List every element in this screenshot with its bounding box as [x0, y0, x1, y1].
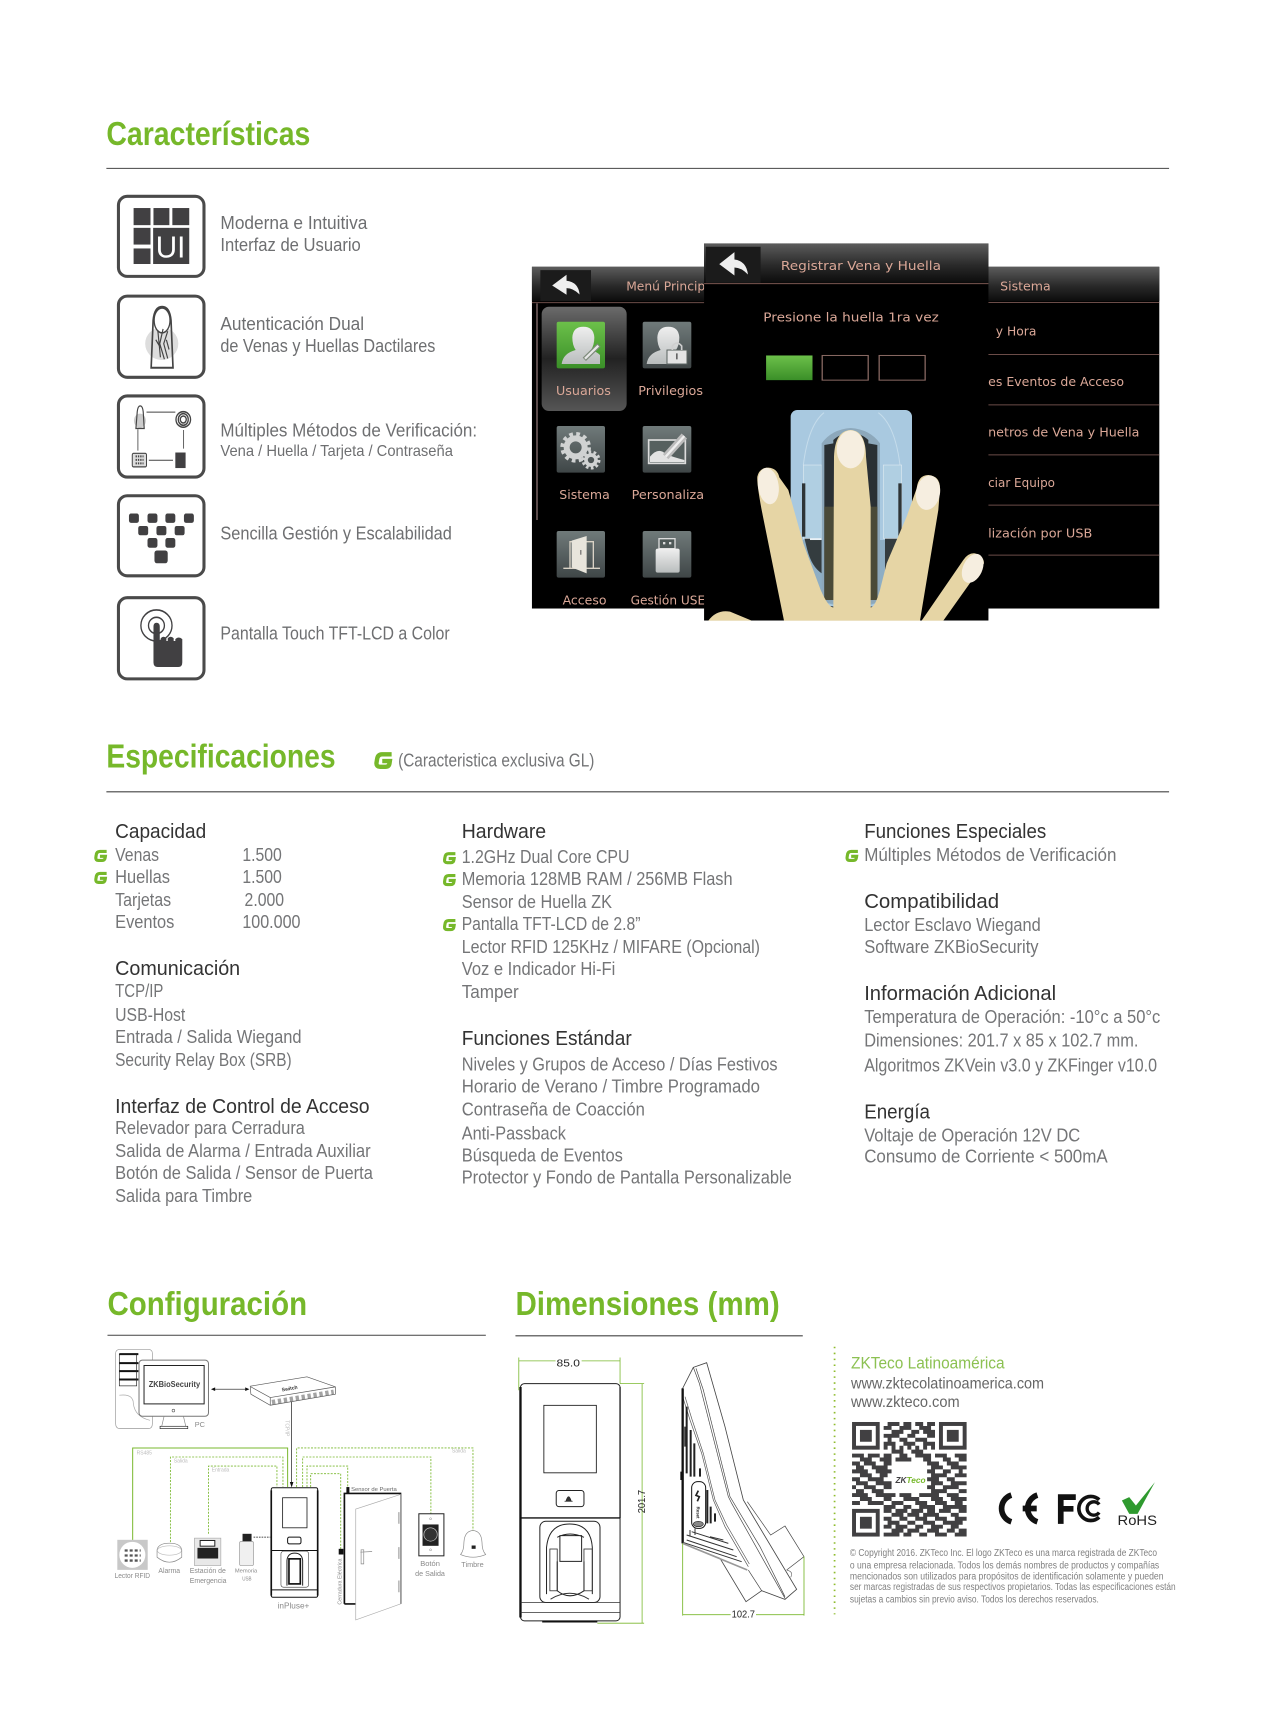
icon: FCC mark [1061, 1496, 1099, 1524]
text block: Capacidad: Eventos [115, 912, 174, 932]
text block: Hardware: Hardware [462, 821, 546, 843]
text block: Hardware: Sensor de Huella ZK [462, 892, 612, 912]
icon: PC with ZKBioSecurity: PC [195, 1420, 206, 1429]
text block: Funciones Estándar: Niveles y Grupos de Acceso / Días Festivos [462, 1054, 778, 1074]
text block: Hardware: 1.2GHz Dual Core CPU [462, 847, 630, 867]
diagram: configuration wiring [115, 1349, 486, 1620]
text block: Comunicación [115, 958, 302, 1070]
text block: Hardware: Pantalla TFT-LCD de 2.8” [462, 914, 640, 934]
drawing: side view [681, 1363, 804, 1602]
screen: main menu: Gestión USE [631, 592, 705, 607]
text block: Interfaz de Control de Acceso [115, 1096, 374, 1206]
screen: system menu: ciar Equipo [988, 475, 1055, 490]
text block: Comunicación: USB-Host [115, 1005, 185, 1025]
heading: Configuración: Configuración [107, 1285, 307, 1322]
text block: Información Adicional [864, 983, 1160, 1075]
text: dual authentication: Autenticación Dual [220, 314, 364, 334]
text block: Energía: Consumo de Corriente < 500mA [864, 1147, 1109, 1167]
icon: alarm: Alarma [158, 1566, 181, 1575]
text block: Comunicación: Comunicación [115, 958, 240, 980]
text block: Hardware: Tamper [462, 982, 519, 1002]
icon: privileges [647, 327, 687, 364]
screen: register vein and fingerprint: Presione la huella 1ra vez [763, 309, 939, 324]
text block: Interfaz de Control de Acceso: Botón de Salida / Sensor de Puerta [115, 1163, 374, 1183]
icon: exit button: Botón [420, 1559, 440, 1568]
text block: Funciones Estándar: Anti-Passback [462, 1123, 567, 1143]
icon: bell: Timbre [461, 1560, 484, 1569]
text: interface: Moderna e Intuitiva [220, 213, 368, 233]
screen: system menu: netros de Vena y Huella [988, 425, 1139, 440]
icon: G mark special functions [847, 851, 858, 860]
text block: Hardware [462, 821, 760, 1002]
icon: inPluse+ device: inPluse+ [278, 1600, 309, 1610]
screen: main menu: Sistema [559, 487, 610, 502]
panel: device screens [532, 243, 1159, 621]
icon: USB memory [235, 1534, 270, 1583]
panel: feature list [118, 196, 477, 679]
icon: RFID reader: Lector RFID [115, 1571, 150, 1580]
text block: Hardware: Voz e Indicador Hi-Fi [462, 959, 615, 979]
panel: specifications column 2 [445, 821, 792, 1187]
icon: RoHS: RoHS [1118, 1512, 1157, 1528]
icon: emergency station: Emergencia [190, 1576, 227, 1585]
icon: door with sensor and lock [338, 1487, 400, 1620]
text: verification methods [220, 421, 477, 460]
icon: alarm [157, 1543, 182, 1575]
icon: hand [708, 430, 988, 621]
icon: switch: Switch [281, 1385, 298, 1394]
icon: door with sensor and lock: Sensor de Puerta [351, 1487, 398, 1493]
heading: Especificaciones: Especificaciones [106, 738, 336, 775]
icon: fingerprint scanner [791, 410, 912, 607]
text block: Hardware: Lector RFID 125KHz / MIFARE (Opcional) [462, 937, 760, 957]
text block: Funciones Especiales [864, 821, 1116, 865]
icon: scalable management [118, 496, 204, 576]
label: width [556, 1356, 582, 1370]
text block: copyright: sujetas a cambios sin previo aviso. Todos los derechos reservados. [850, 1594, 1099, 1605]
text block: copyright [850, 1548, 1176, 1605]
icon: QR code [852, 1424, 967, 1535]
label: depth: 102.7 [732, 1609, 755, 1620]
screen: main menu [532, 267, 705, 609]
text block: contact: ZKTeco Latinoamérica [851, 1354, 1005, 1373]
text block: Energía [864, 1102, 1109, 1167]
text block: Capacidad [115, 821, 300, 932]
text block: Interfaz de Control de Acceso: Interfaz de Control de Acceso [115, 1096, 370, 1118]
text: verification methods: Vena / Huella / Tarjeta / Contraseña [220, 443, 453, 460]
text block: Capacidad: 1.500 [242, 867, 282, 887]
labels: wire names: Salida [174, 1459, 188, 1465]
icon: G marks capacity [96, 851, 107, 882]
icon: door with sensor and lock: Cerradura Eléctrica [338, 1558, 344, 1605]
text: management: Sencilla Gestión y Escalabilidad [220, 524, 452, 544]
icon: inPluse+ device [271, 1488, 318, 1610]
text block: Comunicación: Security Relay Box (SRB) [115, 1050, 292, 1070]
labels: wire names: RS485 [137, 1451, 152, 1457]
text block: Energía: Energía [864, 1102, 931, 1124]
icon: USB drive [656, 539, 680, 573]
wiring: green connections [133, 1448, 473, 1549]
icon: PC with ZKBioSecurity [116, 1349, 208, 1429]
arrow: switch to device [290, 1402, 293, 1486]
dimension lines [519, 1358, 644, 1623]
text block: copyright: o una empresa relacionada. Todos los demás nombres de productos y compañías [850, 1560, 1159, 1571]
icon: personalize [649, 436, 685, 463]
icon: user interface [118, 196, 204, 276]
icon: PC with ZKBioSecurity: ZKBioSecurity [149, 1379, 200, 1389]
text block: Funciones Estándar: Contraseña de Coacción [462, 1099, 645, 1119]
screen: system menu: Sistema [1000, 279, 1051, 294]
text block: Interfaz de Control de Acceso: Salida para Timbre [115, 1186, 252, 1206]
text block: Capacidad: 2.000 [245, 890, 284, 910]
label: width: 85.0 [557, 1359, 580, 1370]
screen: main menu: Personaliza [632, 487, 704, 502]
diagram: dimensions front [519, 1356, 648, 1623]
text block: copyright: © Copyright 2016. ZKTeco Inc. El logo ZKTeco es una marca registrada de ZKTeco [850, 1548, 1157, 1559]
icon: gears [562, 434, 599, 468]
icon: finger veins [118, 296, 204, 377]
labels: wire names [137, 1449, 466, 1474]
text block: Interfaz de Control de Acceso: Relevador para Cerradura [115, 1118, 306, 1138]
icon: USB memory: Memoria [235, 1569, 257, 1575]
icon: verification methods [118, 396, 204, 477]
text block: Funciones Especiales: Múltiples Métodos de Verificación [864, 845, 1116, 865]
text block: Interfaz de Control de Acceso: Salida de Alarma / Entrada Auxiliar [115, 1141, 371, 1161]
text: interface: Interfaz de Usuario [220, 235, 361, 255]
icon: switch [250, 1377, 335, 1405]
text block: Funciones Estándar: Búsqueda de Eventos [462, 1145, 623, 1165]
icon: QR code: ZKTeco [895, 1475, 926, 1485]
text block: Capacidad: 100.000 [242, 912, 300, 932]
text block: Capacidad: Capacidad [115, 821, 206, 843]
icon: G marks hardware [445, 854, 455, 930]
text block: Capacidad: Venas [115, 845, 159, 865]
icon: bell [461, 1530, 486, 1569]
icon: exit button [415, 1514, 446, 1578]
text block: Funciones Estándar: Protector y Fondo de Pantalla Personalizable [462, 1167, 792, 1187]
screen: system menu [988, 267, 1159, 609]
screen: register vein and fingerprint: Registrar Vena y Huella [781, 258, 941, 273]
panel: specifications column 3 [847, 821, 1160, 1167]
drawing: front view [520, 1384, 620, 1622]
icon: user [562, 327, 600, 364]
icon: door [563, 536, 600, 573]
text block: Compatibilidad [864, 891, 1041, 957]
text block: Comunicación: TCP/IP [115, 981, 163, 1001]
icon: emergency station: Estación de [190, 1566, 226, 1575]
label: height: 201.7 [637, 1489, 648, 1513]
text block: Información Adicional: Algoritmos ZKVein v3.0 y ZKFinger v10.0 [864, 1055, 1157, 1075]
text block: Compatibilidad: Lector Esclavo Wiegand [864, 915, 1041, 935]
labels: wire names: Salida [452, 1449, 466, 1455]
drawing: side view: Reset [696, 1507, 701, 1519]
icon: user interface: UI [156, 230, 185, 265]
text: dual authentication [220, 314, 435, 356]
screen: system menu: lización por USB [988, 525, 1092, 540]
icon: touch screen [118, 598, 204, 679]
icon: exit button: de Salida [415, 1569, 446, 1578]
screen: main menu: Privilegios [638, 383, 703, 398]
screen: main menu: Menú Princip [626, 279, 705, 294]
text block: Compatibilidad: Compatibilidad [864, 891, 999, 913]
text block: Capacidad: Tarjetas [115, 890, 171, 910]
text block: Información Adicional: Temperatura de Operación: -10°c a 50°c [864, 1007, 1160, 1027]
text block: Capacidad: 1.500 [242, 845, 282, 865]
text block: Energía: Voltaje de Operación 12V DC [864, 1126, 1080, 1146]
label: TCP/IP: TCP/IP [284, 1420, 290, 1437]
panel: contact and certifications [850, 1354, 1176, 1605]
text: interface [220, 213, 368, 255]
diagram: dimensions side [681, 1363, 804, 1620]
icon: USB memory: USB [242, 1577, 252, 1583]
heading: Dimensiones: Dimensiones (mm) [515, 1285, 780, 1322]
text block: Funciones Estándar: Horario de Verano / Timbre Programado [462, 1076, 760, 1096]
text block: Compatibilidad: Software ZKBioSecurity [864, 937, 1039, 957]
labels: wire names: Entrada [212, 1468, 230, 1474]
screen: system menu: es Eventos de Acceso [988, 374, 1124, 389]
screen: system menu: y Hora [996, 324, 1036, 339]
screen: register vein and fingerprint [704, 243, 988, 621]
legend: GL exclusive feature: (Caracteristica exclusiva GL) [398, 751, 594, 771]
heading: Características: Características [106, 115, 310, 152]
text block: Información Adicional: Información Adicional [864, 983, 1056, 1005]
icon: RoHS [1118, 1482, 1157, 1528]
text: verification methods: Múltiples Métodos de Verificación: [220, 421, 477, 441]
text block: copyright: mencionados son utilizados para propósitos de identificación solamente y pueden [850, 1571, 1164, 1582]
icon: RFID reader [115, 1540, 150, 1580]
text block: copyright: ser marcas registradas de sus respectivos propietarios. Todas las especificaciones están [850, 1582, 1176, 1593]
icon: CE mark [1002, 1495, 1037, 1522]
text: touch screen: Pantalla Touch TFT-LCD a Color [220, 623, 450, 643]
arrow: PC to switch [212, 1388, 249, 1391]
icon: emergency station [190, 1538, 227, 1585]
dimension line: depth [683, 1543, 804, 1616]
text block: contact: www.zkteco.com [850, 1394, 960, 1411]
screen: main menu: Usuarios [556, 383, 611, 398]
text block: Comunicación: Entrada / Salida Wiegand [115, 1027, 302, 1047]
text block: Funciones Estándar [462, 1028, 792, 1187]
text block: Funciones Estándar: Funciones Estándar [462, 1028, 632, 1050]
text block: contact [850, 1354, 1044, 1411]
text block: Hardware: Memoria 128MB RAM / 256MB Flash [462, 869, 733, 889]
screen: main menu: Acceso [563, 592, 607, 607]
text: dual authentication: de Venas y Huellas Dactilares [220, 336, 435, 356]
text block: Capacidad: Huellas [115, 867, 170, 887]
panel: specifications column 1 [96, 821, 374, 1206]
text block: Información Adicional: Dimensiones: 201.7 x 85 x 102.7 mm. [864, 1030, 1138, 1050]
text block: Funciones Especiales: Funciones Especiales [864, 821, 1046, 843]
text block: contact: www.zktecolatinoamerica.com [850, 1375, 1044, 1392]
